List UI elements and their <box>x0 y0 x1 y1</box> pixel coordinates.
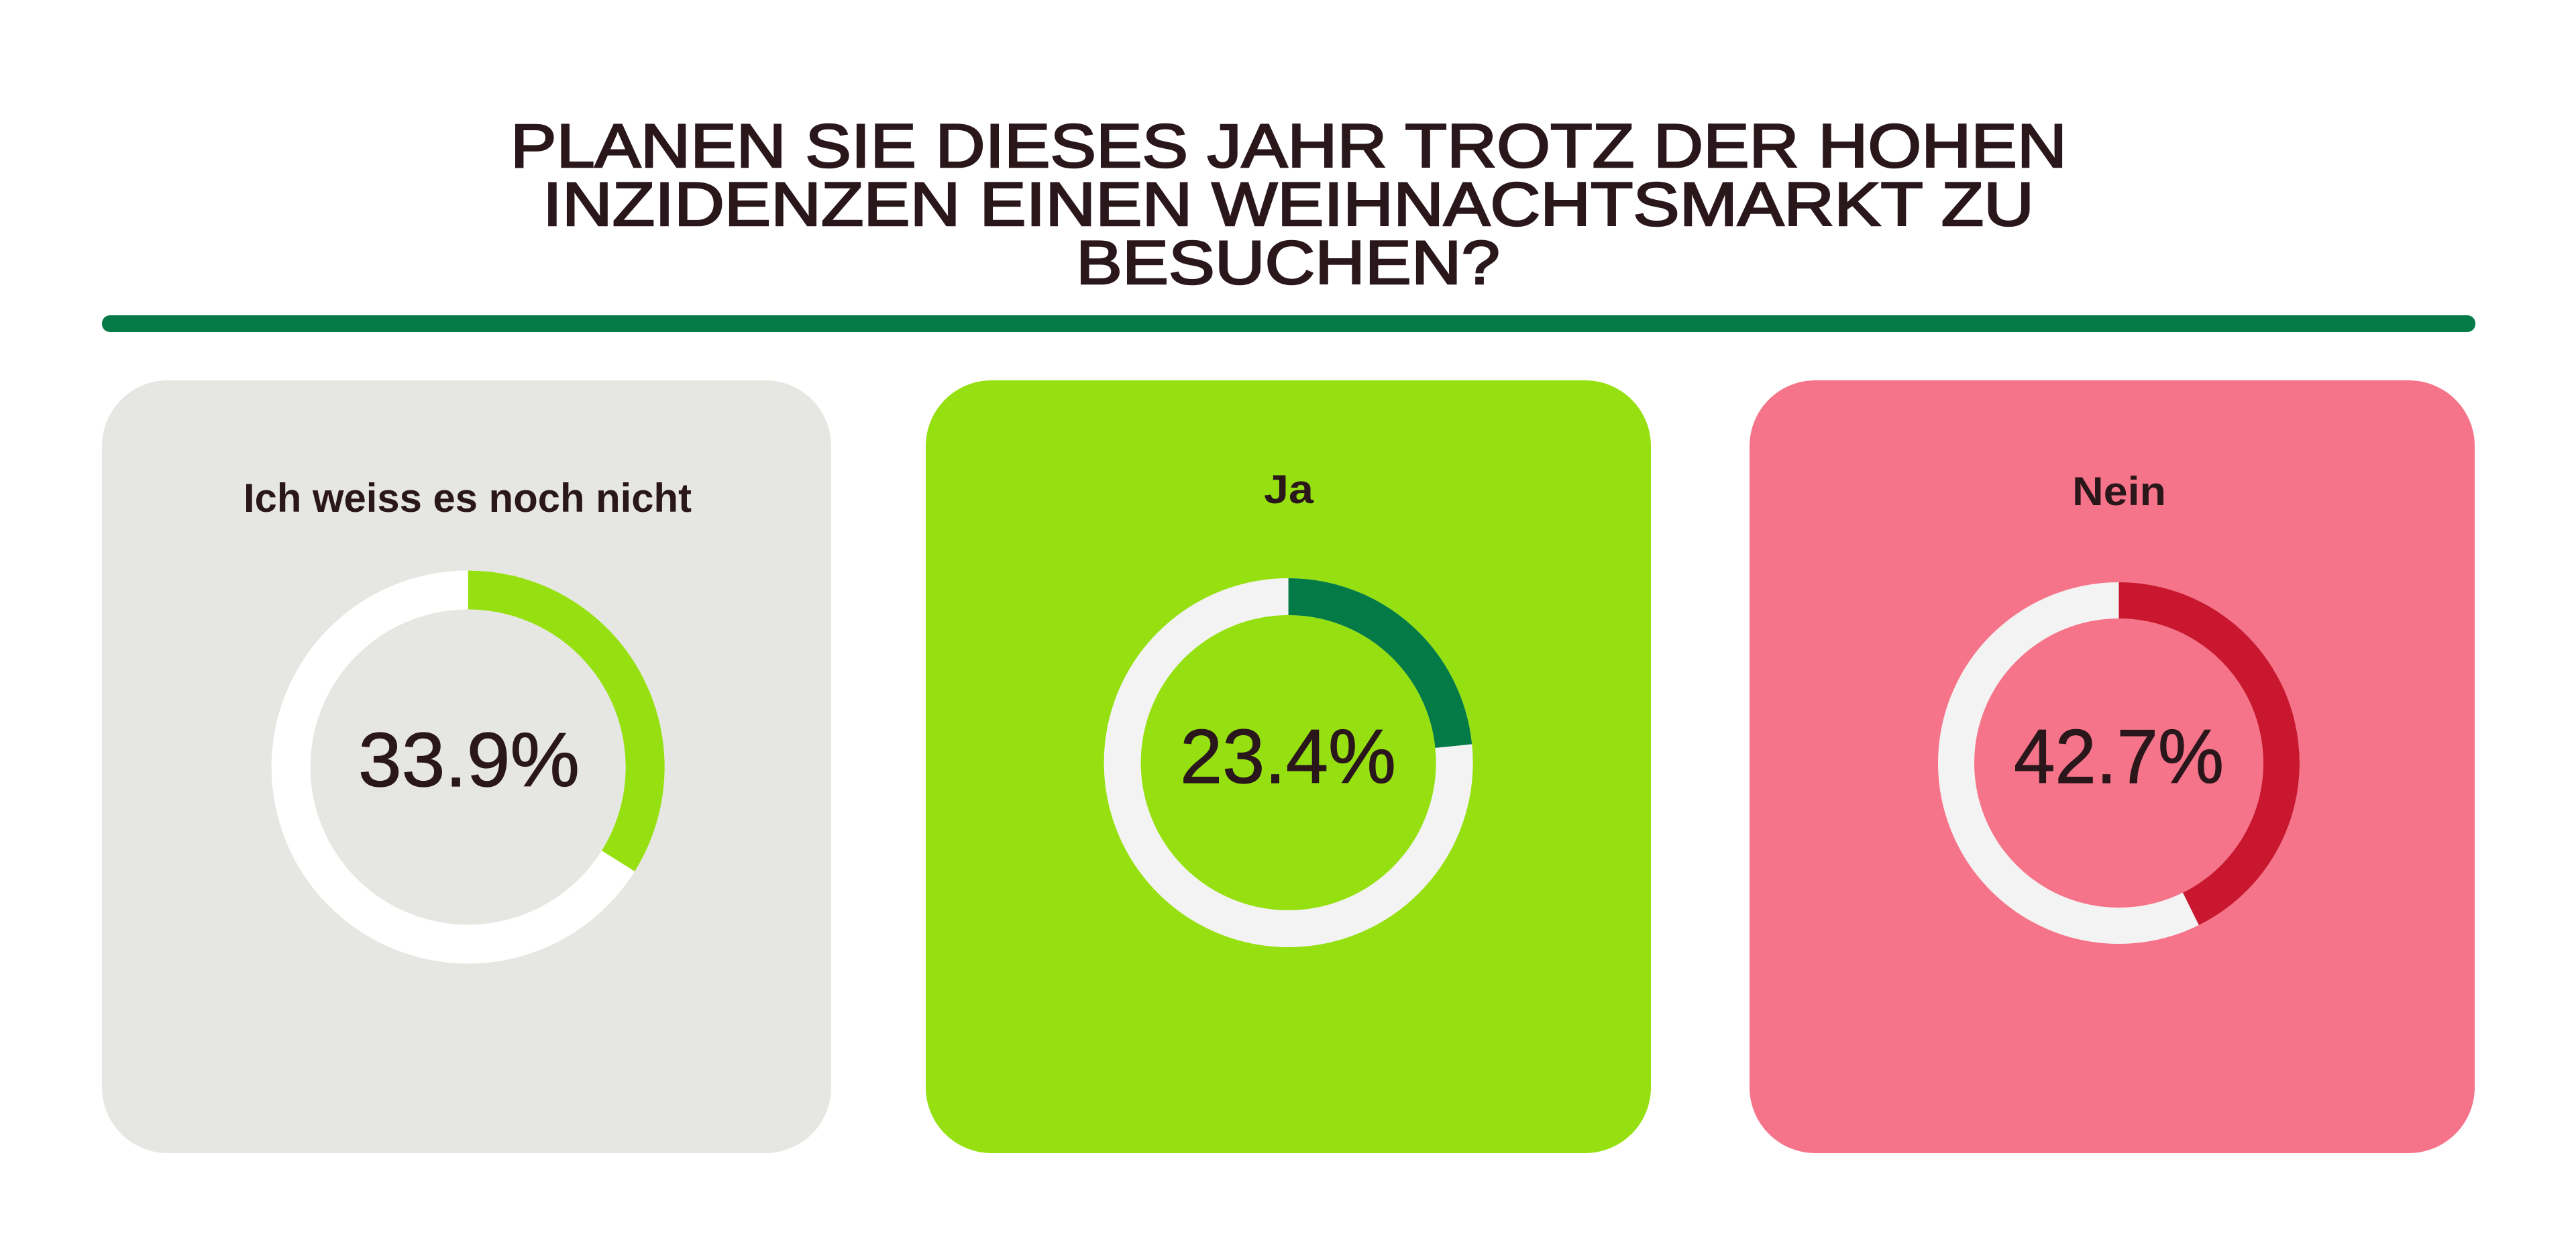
title: PLANEN SIE DIESES JAHR TROTZ DER HOHEN <box>511 112 2067 180</box>
panel: Nein <box>1750 380 2475 1153</box>
title <box>511 112 2067 297</box>
donut chart: 42.7% <box>1956 600 2282 926</box>
donut chart: 23.4% <box>1122 597 1454 928</box>
value: 23.4%: 23.4% <box>1180 714 1396 800</box>
donut chart: 33.9% <box>291 590 645 944</box>
panel background: pink <box>1750 380 2475 1153</box>
green divider bar <box>102 315 2475 332</box>
label: Nein: Nein <box>2072 469 2166 514</box>
label: Ja: Ja <box>1264 467 1314 512</box>
panel background: lime <box>926 380 1651 1153</box>
title: BESUCHEN? <box>1076 229 1500 297</box>
value: 42.7%: 42.7% <box>2014 714 2224 800</box>
label: Ich weiss es noch nicht: Ich weiss es noch nicht <box>244 476 692 521</box>
panel background: grey <box>102 380 831 1153</box>
value: 33.9%: 33.9% <box>358 718 580 803</box>
panel: Ja <box>926 380 1651 1153</box>
panel: Ich weiss es noch nicht <box>102 380 831 1153</box>
title: INZIDENZEN EINEN WEIHNACHTSMARKT ZU <box>543 170 2034 239</box>
